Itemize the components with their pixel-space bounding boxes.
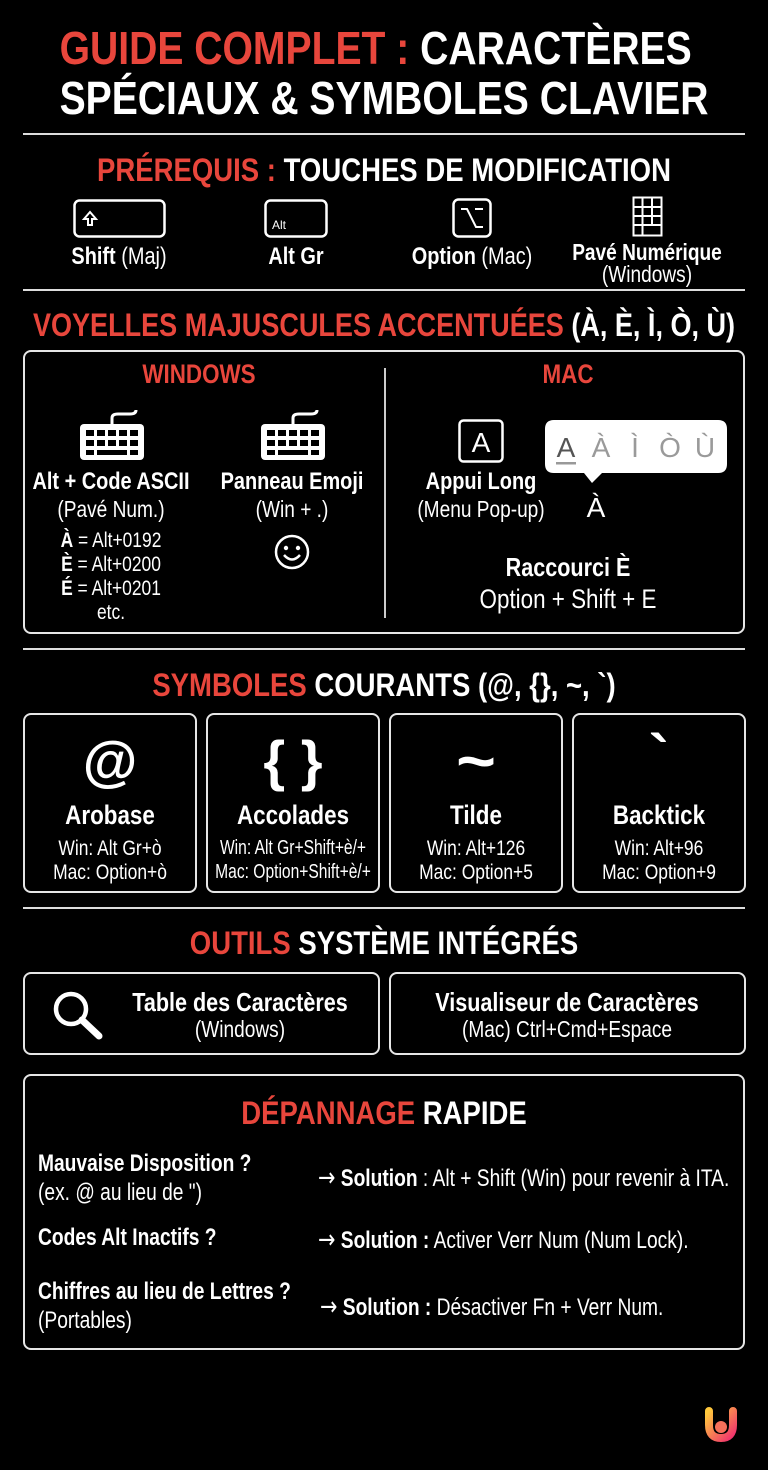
icon: shift key: [73, 199, 166, 238]
text: alt code: À = Alt+0192: [61, 529, 161, 552]
panel: windows / mac: [23, 350, 745, 634]
panel: dépannage: → Solution : Désactiver Fn + Verr Num.: [320, 1292, 663, 1322]
icon: alt key: [264, 199, 328, 238]
card: tilde: ~: [456, 727, 496, 796]
icon: A key: A: [472, 427, 491, 458]
text: raccourci: Option + Shift + E: [480, 584, 656, 614]
row 1: [38, 1150, 251, 1206]
callout: accent popup: À: [592, 432, 611, 463]
icon: smiley: [274, 534, 310, 570]
card: tilde: Win: Alt+126: [427, 837, 525, 860]
text: alt code: (Pavé Num.): [57, 496, 165, 522]
card: accolades: { }: [263, 729, 323, 792]
card: accolades: Win: Alt Gr+Shift+è/+: [220, 837, 366, 859]
card: backtick: [572, 713, 746, 893]
row 1: Mauvaise Disposition ?: [38, 1150, 251, 1177]
text: alt code: É = Alt+0201: [61, 577, 161, 600]
card: tilde: [389, 713, 563, 893]
labels: modifier keys: [71, 239, 722, 287]
card: arobase: [23, 713, 197, 893]
title: GUIDE COMPLET : CARACTÈRES: [60, 22, 692, 74]
text: alt code: È = Alt+0200: [61, 553, 161, 576]
card: visualiseur: [389, 972, 746, 1055]
icon: keyboard 1: [80, 410, 144, 460]
heading: outils: OUTILS SYSTÈME INTÉGRÉS: [190, 925, 578, 961]
callout: accent popup: [545, 420, 727, 519]
panel: dépannage: [23, 1074, 745, 1350]
icon: keyboard 2: [261, 410, 325, 460]
card: accolades: [206, 713, 380, 893]
heading: symboles: SYMBOLES COURANTS (@, {}, ~, `): [152, 667, 616, 703]
text: appui long: Appui Long: [426, 468, 536, 495]
icon: magnifier: [54, 992, 102, 1040]
card: arobase: @: [83, 729, 137, 792]
row 3: Chiffres au lieu de Lettres ?: [38, 1278, 291, 1305]
row 3: (Portables): [38, 1307, 132, 1334]
row 2: Codes Alt Inactifs ?: [38, 1224, 217, 1251]
callout: accent popup: Ù: [695, 432, 715, 463]
labels: modifier keys: Alt Gr: [268, 243, 324, 270]
icon: A key: [458, 419, 504, 463]
icon: alt key: Alt: [272, 218, 287, 232]
text: appui long: (Menu Pop-up): [417, 496, 545, 522]
card: visualiseur: Visualiseur de Caractères: [435, 987, 699, 1017]
card: backtick: `: [649, 723, 669, 790]
title: SPÉCIAUX & SYMBOLES CLAVIER: [60, 72, 708, 124]
card: backtick: Win: Alt+96: [615, 837, 703, 860]
text: raccourci: [480, 552, 656, 614]
labels: modifier keys: Shift (Maj): [71, 243, 167, 270]
heading: windows: WINDOWS: [142, 359, 256, 389]
card: table des caractères: [23, 972, 380, 1055]
icon: option key: [452, 198, 492, 238]
panel: dépannage: → Solution : Activer Verr Num (Num Lock).: [318, 1225, 689, 1255]
text: appui long: [417, 468, 545, 522]
row 3: [38, 1278, 291, 1334]
labels: modifier keys: (Windows): [602, 261, 692, 287]
callout: accent popup: Ò: [659, 432, 681, 463]
logo: [705, 1407, 737, 1442]
card: arobase: Arobase: [65, 800, 155, 830]
card: arobase: Mac: Option+ò: [53, 861, 167, 884]
icon: numpad: [632, 196, 662, 236]
heading: mac: MAC: [542, 359, 594, 389]
labels: modifier keys: Option (Mac): [412, 243, 532, 270]
callout: accent popup: Ì: [631, 432, 639, 463]
labels: modifier keys: Pavé Numérique: [572, 239, 722, 265]
text: emoji panel: Panneau Emoji: [221, 468, 363, 495]
text: alt code: Alt + Code ASCII: [33, 468, 189, 495]
card: table des caractères: (Windows): [195, 1016, 285, 1042]
card: backtick: Mac: Option+9: [602, 861, 716, 884]
card: backtick: Backtick: [613, 800, 705, 830]
card: accolades: Accolades: [237, 800, 349, 830]
text: raccourci: Raccourci È: [506, 552, 630, 582]
card: visualiseur: (Mac) Ctrl+Cmd+Espace: [462, 1016, 672, 1042]
row 1: (ex. @ au lieu de "): [38, 1179, 202, 1206]
title: [60, 22, 708, 124]
heading: dépannage: DÉPANNAGE RAPIDE: [241, 1095, 527, 1131]
heading: voyelles: VOYELLES MAJUSCULES ACCENTUÉES (À, È, Ì, Ò, Ù): [33, 307, 735, 343]
text: alt code: etc.: [97, 601, 125, 624]
heading: prérequis: PRÉREQUIS : TOUCHES DE MODIFICATION: [97, 152, 671, 188]
text: emoji panel: [221, 468, 363, 570]
card: table des caractères: Table des Caractères: [132, 987, 348, 1017]
text: emoji panel: (Win + .): [256, 496, 328, 522]
text: alt code: [33, 468, 189, 624]
card: tilde: Tilde: [450, 800, 502, 830]
card: arobase: Win: Alt Gr+ò: [58, 837, 162, 860]
card: tilde: Mac: Option+5: [419, 861, 533, 884]
card: accolades: Mac: Option+Shift+è/+: [215, 861, 371, 883]
panel: dépannage: → Solution : Alt + Shift (Win) pour revenir à ITA.: [318, 1163, 729, 1193]
callout: accent popup: A: [557, 432, 576, 463]
